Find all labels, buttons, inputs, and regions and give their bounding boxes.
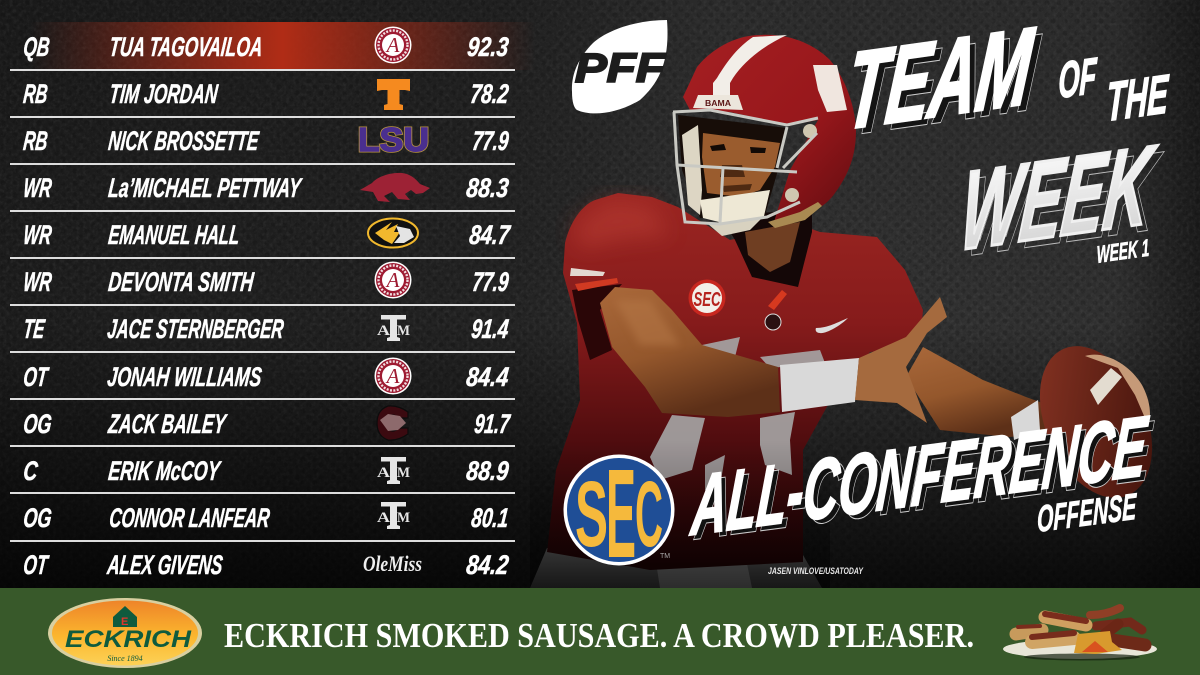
row: QB Tua Tagovailoa: QB xyxy=(22,31,51,62)
logo: South Carolina xyxy=(377,406,408,440)
helmet nameplate: BAMA xyxy=(705,99,731,108)
neck shadow and undershirt xyxy=(720,210,812,287)
logo: Texas A&M xyxy=(377,315,410,341)
logo: Alabama xyxy=(374,26,412,64)
row: OG Connor Lanfear xyxy=(10,502,515,542)
row: WR La'Michael Pettway xyxy=(10,172,515,212)
row: QB Tua Tagovailoa xyxy=(10,26,515,71)
left wrist tape xyxy=(1011,400,1040,440)
hand xyxy=(855,297,947,423)
title: OF: OF xyxy=(1058,46,1098,109)
football xyxy=(1018,329,1174,515)
SEC logo xyxy=(564,443,674,584)
row: OG Zack Bailey: ZACK BAILEY xyxy=(106,408,229,439)
Eckrich logo: E xyxy=(121,616,128,628)
eyes xyxy=(710,144,766,153)
wristband xyxy=(780,358,859,412)
row: OT Jonah Williams: 84.4 xyxy=(465,361,510,392)
logo: Alabama: A xyxy=(385,364,400,388)
logo: Missouri tiger xyxy=(368,218,418,248)
row: WR Devonta Smith: WR xyxy=(22,266,54,297)
upper arm xyxy=(600,287,780,417)
row: RB Tim Jordan: 78.2 xyxy=(469,78,510,109)
belt panel xyxy=(655,554,752,588)
helmet shell xyxy=(683,35,856,225)
row: RB Tim Jordan xyxy=(10,78,515,118)
row: WR Emanuel Hall: WR xyxy=(22,219,54,250)
row: WR Devonta Smith: DEVONTA SMITH xyxy=(107,266,256,297)
row: OT Alex Givens: OT xyxy=(22,549,51,580)
row: OG Zack Bailey xyxy=(10,406,515,447)
photo credit: JASEN VINLOVE/USATODAY xyxy=(768,566,864,577)
player photo: quarterback illustration xyxy=(530,35,1174,590)
logo: Alabama xyxy=(374,358,412,394)
row: OT Jonah Williams xyxy=(10,358,515,400)
swoosh xyxy=(816,318,848,333)
row: OG Connor Lanfear: OG xyxy=(22,502,53,533)
row: OT Jonah Williams: JONAH WILLIAMS xyxy=(106,361,263,392)
chin guard xyxy=(700,190,770,226)
sponsor banner xyxy=(0,588,1200,675)
row: WR La'Michael Pettway: WR xyxy=(22,172,54,203)
facemask interior xyxy=(678,115,787,218)
logo: Tennessee xyxy=(377,79,410,110)
helmet snaps xyxy=(785,124,817,202)
SEC logo: TM xyxy=(660,553,670,560)
row: RB Nick Brossette: NICK BROSSETTE xyxy=(107,125,261,156)
dark sleeve underside xyxy=(572,284,622,360)
row: C Erik McCoy: 88.9 xyxy=(465,455,510,486)
nose and mouth shading xyxy=(720,165,752,192)
row: WR Devonta Smith xyxy=(10,262,515,306)
helmet strap xyxy=(768,202,822,228)
slogan: ECKRICH SMOKED SAUSAGE. A CROWD PLEASER. xyxy=(224,616,974,655)
neck strap xyxy=(708,218,762,236)
helmet nameplate xyxy=(693,95,743,110)
row: WR Emanuel Hall: EMANUEL HALL xyxy=(107,219,241,250)
row: RB Nick Brossette xyxy=(10,121,515,165)
logo: Texas A&M: A xyxy=(377,510,390,526)
logo: Texas A&M xyxy=(377,502,410,529)
subtitle: WEEK 1: WEEK 1 xyxy=(1096,235,1150,269)
row: TE Jace Sternberger xyxy=(10,313,515,353)
jersey shoulder highlight xyxy=(575,200,670,250)
row: WR La'Michael Pettway: La’MICHAEL PETTWAY xyxy=(107,172,304,203)
Eckrich logo: Since 1894 xyxy=(107,654,143,663)
SEC patch: SEC xyxy=(694,289,721,311)
neck skin xyxy=(745,222,800,272)
PFF football logo xyxy=(572,20,668,113)
highlight bar: top row xyxy=(30,22,535,70)
logo: Texas A&M: M xyxy=(397,465,410,481)
row: TE Jace Sternberger: JACE STERNBERGER xyxy=(106,313,286,344)
jersey number xyxy=(650,337,825,500)
bottom shading xyxy=(530,440,830,590)
row: OG Connor Lanfear: CONNOR LANFEAR xyxy=(108,502,272,533)
row: WR La'Michael Pettway: 88.3 xyxy=(465,172,510,203)
sleeve stripes xyxy=(570,268,618,291)
row: TE Jace Sternberger: TE xyxy=(22,313,47,344)
Eckrich logo: ECKRICH xyxy=(65,626,192,653)
helmet stripe xyxy=(713,35,787,97)
SEC logo: E xyxy=(606,443,636,584)
title: TEAM: TEAM xyxy=(848,11,1045,159)
logo: Texas A&M: M xyxy=(397,323,410,339)
row: RB Tim Jordan: TIM JORDAN xyxy=(108,78,220,109)
logo: Alabama: A xyxy=(385,33,400,57)
row: C Erik McCoy: C xyxy=(22,455,40,486)
face xyxy=(702,133,780,197)
row: WR Emanuel Hall: 84.7 xyxy=(468,219,513,250)
SEC patch xyxy=(688,280,726,316)
row: WR Emanuel Hall xyxy=(10,218,515,259)
PFF football logo: PFF xyxy=(575,45,666,91)
title: TEAM xyxy=(841,4,1046,160)
row: RB Nick Brossette: 77.9 xyxy=(471,125,510,156)
logo: Alabama xyxy=(374,262,412,298)
row: WR Devonta Smith: 77.9 xyxy=(471,266,510,297)
logo: LSU: LSU xyxy=(358,121,429,158)
placket xyxy=(768,290,787,310)
row: C Erik McCoy xyxy=(10,455,515,494)
logo: LSU: LSU xyxy=(358,121,429,158)
logo: Texas A&M: A xyxy=(377,465,390,481)
row: OG Connor Lanfear: 80.1 xyxy=(470,502,510,533)
logo: Texas A&M xyxy=(377,457,410,484)
row: OG Zack Bailey: 91.7 xyxy=(473,408,513,439)
logo: Texas A&M: M xyxy=(397,510,410,526)
logo: Alabama: A xyxy=(385,268,400,292)
facemask xyxy=(673,110,818,224)
chest Alabama badge xyxy=(765,314,781,330)
logo: Texas A&M: A xyxy=(377,323,390,339)
helmet number xyxy=(813,65,847,112)
SEC logo: C xyxy=(635,462,663,566)
jersey body xyxy=(547,193,923,570)
pants xyxy=(530,548,822,588)
left helmet pad xyxy=(682,125,702,215)
right forearm xyxy=(906,347,1048,437)
row: QB Tua Tagovailoa: 92.3 xyxy=(466,31,510,62)
row: OT Alex Givens xyxy=(22,549,510,580)
logo: Ole Miss: OleMiss xyxy=(363,551,422,576)
row: RB Nick Brossette: RB xyxy=(22,125,49,156)
Eckrich logo xyxy=(48,598,202,668)
arm highlight xyxy=(615,300,680,345)
row: OT Alex Givens: 84.2 xyxy=(465,549,510,580)
row: RB Tim Jordan: RB xyxy=(22,78,49,109)
row: QB Tua Tagovailoa: TUA TAGOVAILOA xyxy=(108,31,264,62)
row: OT Jonah Williams: OT xyxy=(22,361,51,392)
row: TE Jace Sternberger: 91.4 xyxy=(470,313,510,344)
food plate xyxy=(1003,608,1157,660)
logo: Arkansas razorback xyxy=(360,173,430,202)
row: OT Alex Givens: ALEX GIVENS xyxy=(105,549,224,580)
SEC logo: S xyxy=(575,462,608,566)
row: C Erik McCoy: ERIK McCOY xyxy=(107,455,223,486)
row: OG Zack Bailey: OG xyxy=(22,408,53,439)
